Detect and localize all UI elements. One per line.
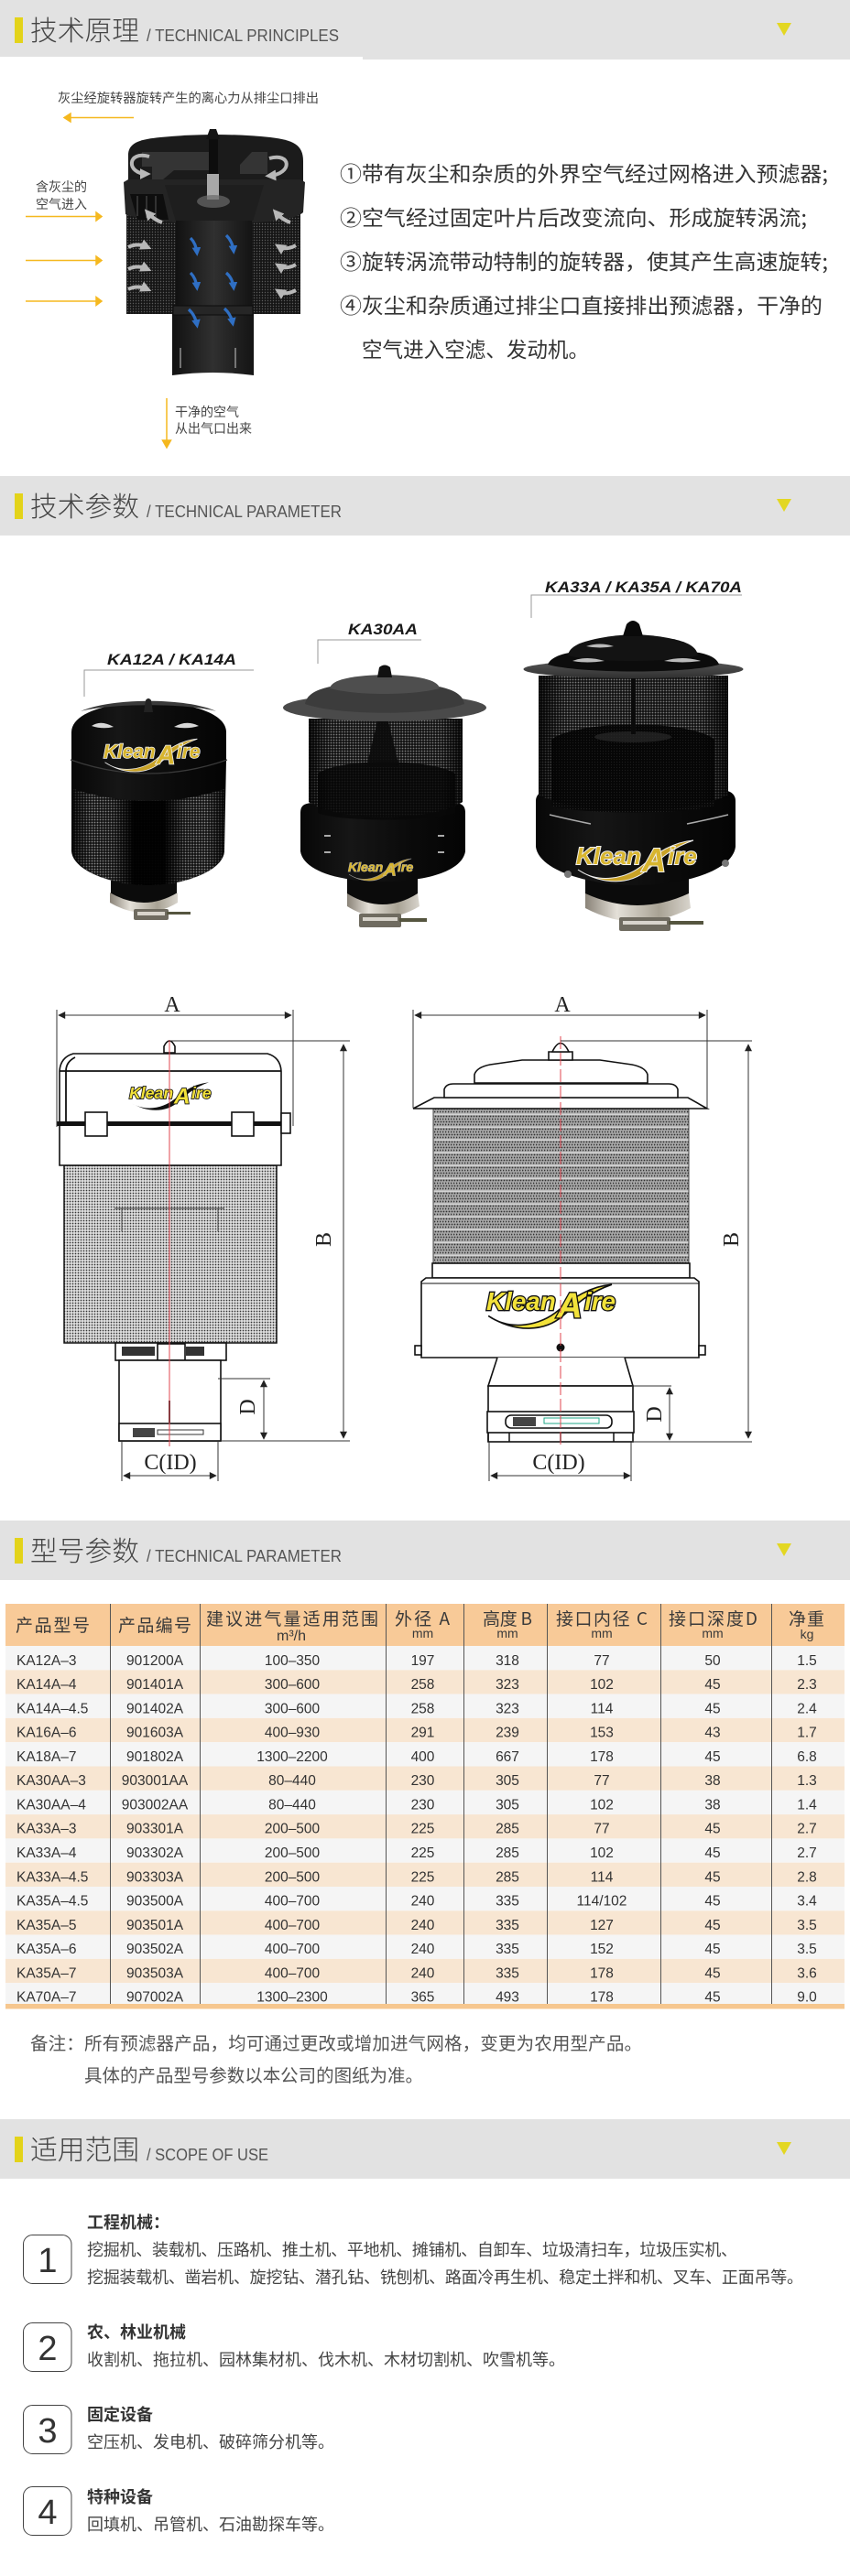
row KA35A-6: 400–700 bbox=[265, 1942, 321, 1957]
row KA33A-4: 225 bbox=[411, 1845, 434, 1861]
row KA70A-7: 9.0 bbox=[797, 1990, 817, 2005]
section header: scope of use bbox=[0, 2119, 850, 2179]
row KA18A-7: 901802A bbox=[126, 1749, 184, 1765]
table header row: 接口深度D bbox=[669, 1606, 757, 1630]
row KA33A-4: 2.7 bbox=[797, 1845, 817, 1861]
row KA14A-4.5: 300–600 bbox=[265, 1701, 321, 1717]
row KA70A-7: KA70A–7 bbox=[16, 1990, 77, 2005]
row KA16A-6: 901603A bbox=[126, 1725, 184, 1741]
row KA30AA-4: 305 bbox=[496, 1798, 519, 1813]
row KA70A-7: 178 bbox=[590, 1990, 614, 2005]
section header: scope of use: / SCOPE OF USE bbox=[147, 2146, 268, 2164]
text block: working principle steps: ③旋转涡流带动特制的旋转器，使其产生高速旋转; bbox=[340, 244, 828, 276]
section header: scope of use: 适用范围 bbox=[30, 2127, 139, 2168]
row KA30AA-4: KA30AA–4 bbox=[16, 1798, 86, 1813]
dimension D: D bbox=[643, 1406, 667, 1423]
section header: technical principles bbox=[0, 0, 850, 60]
scope item 1: construction machinery: 工程机械： bbox=[87, 2210, 169, 2234]
table header row: mm bbox=[412, 1626, 433, 1640]
text block: working principle steps bbox=[340, 157, 828, 363]
row KA12A-3: 100–350 bbox=[265, 1653, 321, 1669]
table header row: 外径 A bbox=[395, 1606, 450, 1630]
row KA14A-4.5: KA14A–4.5 bbox=[16, 1701, 88, 1717]
logo: A bbox=[641, 841, 666, 879]
row KA35A-4.5: 335 bbox=[496, 1893, 519, 1910]
row KA14A-4: 45 bbox=[704, 1677, 721, 1693]
arrow: clean air outlet bbox=[163, 398, 170, 448]
row KA35A-5 bbox=[16, 1918, 817, 1933]
row KA16A-6: 291 bbox=[411, 1725, 434, 1741]
number badge: 4 bbox=[38, 2494, 58, 2532]
row KA16A-6: 43 bbox=[704, 1725, 721, 1741]
logo: ire bbox=[177, 741, 200, 763]
caption: clean air out: 从出气口出来 bbox=[175, 419, 252, 438]
row KA14A-4.5: 45 bbox=[704, 1701, 721, 1717]
row KA35A-6: 240 bbox=[411, 1942, 435, 1957]
scope item 4: special equipment: 特种设备 bbox=[87, 2484, 153, 2508]
section header: technical principles: 技术原理 bbox=[30, 8, 139, 49]
logo: Klean bbox=[576, 842, 641, 870]
row KA35A-6: 45 bbox=[704, 1942, 721, 1957]
row KA16A-6: 400–930 bbox=[265, 1725, 321, 1741]
logo bbox=[486, 1284, 616, 1328]
row KA30AA-3: KA30AA–3 bbox=[16, 1773, 86, 1789]
table header row bbox=[16, 1606, 824, 1644]
row KA14A-4.5: 114 bbox=[591, 1701, 614, 1717]
row KA12A-3: 50 bbox=[704, 1653, 721, 1669]
arrows: inlet air bbox=[26, 212, 102, 306]
row KA70A-7: 907002A bbox=[126, 1990, 184, 2005]
product: KA12A / KA14A bbox=[71, 651, 254, 920]
caption: dusty air in: 含灰尘的 bbox=[36, 178, 87, 196]
row KA14A-4: 102 bbox=[590, 1677, 614, 1693]
row KA12A-3: 197 bbox=[411, 1653, 434, 1669]
section header: model parameters bbox=[0, 1521, 850, 1580]
row KA35A-5: 240 bbox=[411, 1918, 435, 1933]
row KA30AA-3 bbox=[16, 1773, 817, 1789]
row KA30AA-3: 38 bbox=[704, 1773, 721, 1789]
row KA14A-4.5: 2.4 bbox=[797, 1701, 817, 1717]
dimension A bbox=[57, 993, 350, 1441]
row KA30AA-3: 1.3 bbox=[797, 1773, 817, 1789]
row KA35A-7: KA35A–7 bbox=[16, 1966, 77, 1981]
row KA35A-4.5: KA35A–4.5 bbox=[16, 1893, 88, 1910]
row KA33A-3: 225 bbox=[411, 1822, 434, 1836]
dimension D: D bbox=[236, 1399, 260, 1415]
table backgrounds bbox=[5, 1604, 845, 2008]
row KA18A-7: 45 bbox=[704, 1749, 721, 1765]
row KA33A-3: 2.7 bbox=[797, 1822, 817, 1836]
row KA33A-4.5: 903303A bbox=[126, 1869, 184, 1886]
row KA33A-4: 45 bbox=[704, 1845, 721, 1861]
logo: Klean bbox=[129, 1084, 173, 1102]
row KA33A-3 bbox=[16, 1822, 817, 1836]
row KA35A-4.5: 400–700 bbox=[265, 1893, 321, 1910]
scope item 3: stationary equipment bbox=[24, 2402, 334, 2453]
table header row: 产品型号 bbox=[16, 1612, 90, 1637]
dimension drawing: lid-type filter bbox=[57, 993, 350, 1481]
row KA35A-5: KA35A–5 bbox=[16, 1918, 77, 1933]
row KA14A-4: 2.3 bbox=[797, 1677, 817, 1693]
table header row: 高度 B bbox=[483, 1606, 532, 1630]
logo: ire bbox=[398, 860, 413, 874]
number badge bbox=[24, 2235, 71, 2283]
row KA30AA-4: 230 bbox=[411, 1798, 435, 1813]
row KA33A-4: 903302A bbox=[126, 1845, 184, 1861]
number badge: 1 bbox=[38, 2242, 58, 2280]
row KA35A-7: 335 bbox=[496, 1966, 519, 1981]
model label: KA12A / KA14A bbox=[107, 651, 236, 668]
row KA35A-4.5 bbox=[16, 1893, 817, 1910]
product photo bbox=[283, 665, 486, 927]
arrow: dust outlet bbox=[64, 114, 134, 122]
row KA14A-4.5: 901402A bbox=[126, 1701, 184, 1717]
dimension D bbox=[643, 1388, 670, 1440]
text block: working principle steps: ④灰尘和杂质通过排尘口直接排出预滤器，干净的 bbox=[340, 288, 823, 319]
row KA35A-6: 903502A bbox=[126, 1942, 184, 1957]
row KA12A-3: 1.5 bbox=[797, 1653, 817, 1669]
row KA14A-4 bbox=[16, 1677, 817, 1693]
row KA12A-3: 901200A bbox=[126, 1653, 184, 1669]
row KA33A-3: 45 bbox=[704, 1822, 721, 1836]
row KA33A-4.5: 114 bbox=[591, 1869, 614, 1886]
note text bbox=[30, 2029, 642, 2087]
model label: KA30AA bbox=[348, 621, 418, 638]
row KA35A-5: 127 bbox=[590, 1918, 614, 1933]
dimension B: B bbox=[720, 1232, 744, 1247]
text block: working principle steps: ②空气经过固定叶片后改变流向、形成旋转涡流; bbox=[340, 200, 807, 232]
section header: model parameters: 型号参数 bbox=[30, 1529, 139, 1569]
logo bbox=[129, 1082, 212, 1110]
row KA14A-4.5 bbox=[16, 1701, 817, 1717]
table header row: 净重 bbox=[789, 1606, 824, 1630]
row KA35A-7 bbox=[16, 1966, 817, 1981]
row KA33A-4: 285 bbox=[496, 1845, 519, 1861]
row KA35A-6 bbox=[16, 1942, 817, 1957]
scope item 3: stationary equipment: 固定设备 bbox=[87, 2402, 153, 2426]
dimension A: A bbox=[164, 993, 180, 1017]
row KA33A-4: 200–500 bbox=[265, 1845, 321, 1861]
row KA33A-4 bbox=[16, 1845, 817, 1861]
row KA33A-4.5 bbox=[16, 1869, 817, 1886]
row KA70A-7: 45 bbox=[704, 1990, 721, 2005]
row KA14A-4.5: 258 bbox=[411, 1701, 434, 1717]
logo bbox=[104, 739, 200, 772]
row KA14A-4: KA14A–4 bbox=[16, 1677, 77, 1693]
scope item 2: agriculture and forestry bbox=[24, 2320, 565, 2371]
row KA33A-4.5: KA33A–4.5 bbox=[16, 1869, 88, 1886]
dimension C(ID): C(ID) bbox=[144, 1451, 197, 1475]
note text: 具体的产品型号参数以本公司的图纸为准。 bbox=[84, 2061, 423, 2087]
text block: working principle steps: ①带有灰尘和杂质的外界空气经过网格进入预滤器; bbox=[340, 157, 828, 188]
product: KA33A / KA35A / KA70A bbox=[524, 579, 744, 931]
row KA30AA-4: 102 bbox=[590, 1798, 614, 1813]
row KA14A-4: 300–600 bbox=[265, 1677, 321, 1693]
row KA35A-4.5: 903500A bbox=[126, 1893, 184, 1910]
row KA33A-4.5: 225 bbox=[411, 1869, 434, 1886]
section header: technical parameter: 技术参数 bbox=[30, 484, 139, 525]
row KA35A-7: 903503A bbox=[126, 1966, 184, 1981]
product: KA30AA bbox=[283, 621, 486, 927]
row KA16A-6: 1.7 bbox=[797, 1725, 817, 1741]
row KA35A-5: 335 bbox=[496, 1918, 519, 1933]
row KA12A-3: 318 bbox=[496, 1653, 519, 1669]
row KA14A-4.5: 323 bbox=[496, 1701, 519, 1717]
row KA33A-4: 102 bbox=[590, 1845, 614, 1861]
dimension A: A bbox=[554, 993, 571, 1017]
diagram: airflow cross-section bbox=[26, 89, 319, 448]
product photo bbox=[71, 698, 227, 920]
row KA14A-4: 323 bbox=[496, 1677, 519, 1693]
logo bbox=[576, 840, 697, 882]
row KA35A-7: 240 bbox=[411, 1966, 435, 1981]
dimension D bbox=[236, 1380, 264, 1439]
scope item 4: special equipment: 回填机、吊管机、石油勘探车等。 bbox=[87, 2512, 334, 2536]
logo: A bbox=[556, 1287, 583, 1326]
table header row: 产品编号 bbox=[118, 1612, 191, 1637]
row KA35A-7: 45 bbox=[704, 1966, 721, 1981]
logo: ire bbox=[668, 842, 697, 870]
row KA18A-7 bbox=[16, 1749, 817, 1765]
logo: Klean bbox=[104, 741, 156, 763]
row KA30AA-3: 77 bbox=[594, 1773, 610, 1789]
row KA33A-4.5: 200–500 bbox=[265, 1869, 321, 1886]
number badge: 2 bbox=[38, 2330, 58, 2368]
row KA18A-7: 400 bbox=[411, 1749, 435, 1765]
row KA18A-7: KA18A–7 bbox=[16, 1749, 77, 1765]
filter cutaway bbox=[124, 129, 305, 375]
row KA14A-4: 258 bbox=[411, 1677, 434, 1693]
number badge bbox=[24, 2406, 71, 2453]
scope item 1: construction machinery bbox=[24, 2210, 803, 2289]
logo: Klean bbox=[348, 860, 383, 874]
table header row: mm bbox=[591, 1626, 613, 1640]
product photo bbox=[524, 621, 744, 931]
logo bbox=[348, 859, 413, 881]
table header row: m³/h bbox=[277, 1629, 306, 1644]
row KA16A-6 bbox=[16, 1725, 817, 1741]
row KA12A-3: KA12A–3 bbox=[16, 1653, 77, 1669]
row KA33A-3: 77 bbox=[594, 1822, 610, 1836]
logo: A bbox=[173, 1084, 191, 1109]
dimension drawing: hat-type filter bbox=[413, 993, 752, 1481]
row KA70A-7: 365 bbox=[411, 1990, 434, 2005]
row KA33A-4.5: 45 bbox=[704, 1869, 721, 1886]
text block: working principle steps: 空气进入空滤、发动机。 bbox=[362, 332, 589, 363]
row KA33A-3: KA33A–3 bbox=[16, 1822, 77, 1836]
row KA30AA-4: 80–440 bbox=[268, 1798, 316, 1813]
row KA30AA-4: 903002AA bbox=[122, 1798, 189, 1813]
row KA35A-4.5: 114/102 bbox=[577, 1893, 627, 1910]
dimension A bbox=[413, 993, 752, 1442]
row KA35A-6: KA35A–6 bbox=[16, 1942, 77, 1957]
logo: Klean bbox=[486, 1287, 556, 1315]
row KA35A-4.5: 240 bbox=[411, 1893, 435, 1910]
section header: technical principles: / TECHNICAL PRINCIPLES bbox=[147, 27, 339, 45]
caption: clean air out: 干净的空气 bbox=[175, 403, 239, 421]
row KA30AA-4 bbox=[16, 1798, 817, 1813]
row KA33A-4.5: 285 bbox=[496, 1869, 519, 1886]
note text: 备注：所有预滤器产品，均可通过更改或增加进气网格，变更为农用型产品。 bbox=[30, 2029, 642, 2055]
row KA18A-7: 1300–2200 bbox=[256, 1749, 328, 1765]
row KA14A-4: 901401A bbox=[126, 1677, 184, 1693]
row KA35A-7: 400–700 bbox=[265, 1966, 321, 1981]
scope item 1: construction machinery: 挖掘机、装载机、压路机、推土机、平地机、摊铺机、自卸车、垃圾清扫车，垃圾压实机、 bbox=[87, 2237, 737, 2261]
section header: model parameters: / TECHNICAL PARAMETER bbox=[147, 1547, 342, 1565]
table header row: 接口内径 C bbox=[556, 1606, 648, 1630]
row KA70A-7: 493 bbox=[496, 1990, 519, 2005]
scope item 2: agriculture and forestry: 收割机、拖拉机、园林集材机、伐木机、木材切割机、吹雪机等。 bbox=[87, 2347, 565, 2371]
row KA35A-5: 400–700 bbox=[265, 1918, 321, 1933]
row KA35A-7: 3.6 bbox=[797, 1966, 817, 1981]
scope item 3: stationary equipment: 空压机、发电机、破碎筛分机等。 bbox=[87, 2430, 334, 2453]
row KA35A-5: 3.5 bbox=[797, 1918, 817, 1933]
caption: dust discharge: 灰尘经旋转器旋转产生的离心力从排尘口排出 bbox=[58, 89, 319, 107]
row KA70A-7: 1300–2300 bbox=[256, 1990, 328, 2005]
caption: dusty air in: 空气进入 bbox=[36, 195, 87, 213]
row KA16A-6: 239 bbox=[496, 1725, 519, 1741]
row KA35A-5: 903501A bbox=[126, 1918, 184, 1933]
row KA35A-5: 45 bbox=[704, 1918, 721, 1933]
table header row: kg bbox=[801, 1627, 813, 1641]
row KA16A-6: KA16A–6 bbox=[16, 1725, 77, 1741]
row KA33A-3: 200–500 bbox=[265, 1822, 321, 1836]
logo: A bbox=[383, 860, 397, 880]
number badge: 3 bbox=[38, 2412, 58, 2451]
dimension C(ID) bbox=[122, 1441, 218, 1481]
logo: ire bbox=[584, 1287, 616, 1315]
dimension C(ID) bbox=[489, 1442, 631, 1481]
scope item 2: agriculture and forestry: 农、林业机械 bbox=[87, 2320, 186, 2343]
scope item 1: construction machinery: 挖掘装载机、凿岩机、旋挖钻、潜孔钻、铣刨机、路面冷再生机、稳定土拌和机、叉车、正面吊等。 bbox=[87, 2265, 803, 2289]
row KA33A-4: KA33A–4 bbox=[16, 1845, 77, 1861]
row KA33A-4.5: 2.8 bbox=[797, 1869, 817, 1886]
row KA35A-4.5: 45 bbox=[704, 1893, 721, 1910]
dimension B: B bbox=[312, 1232, 336, 1247]
row KA30AA-4: 1.4 bbox=[797, 1798, 817, 1813]
row KA30AA-3: 230 bbox=[411, 1773, 435, 1789]
row KA35A-6: 335 bbox=[496, 1942, 519, 1957]
row KA12A-3 bbox=[16, 1653, 817, 1669]
row KA18A-7: 6.8 bbox=[797, 1749, 817, 1765]
row KA30AA-3: 903001AA bbox=[122, 1773, 189, 1789]
row KA35A-4.5: 3.4 bbox=[797, 1893, 817, 1910]
row KA12A-3: 77 bbox=[594, 1653, 610, 1669]
row KA70A-7 bbox=[16, 1990, 817, 2005]
table: model parameters bbox=[5, 1604, 845, 2008]
row KA35A-6: 152 bbox=[590, 1942, 614, 1957]
row KA30AA-3: 80–440 bbox=[268, 1773, 316, 1789]
row KA33A-3: 903301A bbox=[126, 1822, 184, 1836]
row KA16A-6: 153 bbox=[590, 1725, 614, 1741]
table header row: 建议进气量适用范围 bbox=[206, 1606, 378, 1630]
section header: technical parameter: / TECHNICAL PARAMETER bbox=[147, 503, 342, 521]
row KA18A-7: 667 bbox=[496, 1749, 519, 1765]
number badge bbox=[24, 2486, 71, 2536]
section header: technical parameter bbox=[0, 476, 850, 536]
row KA18A-7: 178 bbox=[590, 1749, 614, 1765]
row KA30AA-3: 305 bbox=[496, 1773, 519, 1789]
number badge bbox=[24, 2323, 71, 2371]
logo: A bbox=[156, 741, 175, 770]
table header row: mm bbox=[496, 1626, 518, 1640]
row KA35A-6: 3.5 bbox=[797, 1942, 817, 1957]
row KA33A-3: 285 bbox=[496, 1822, 519, 1836]
row KA35A-7: 178 bbox=[590, 1966, 614, 1981]
scope item 4: special equipment bbox=[24, 2484, 334, 2536]
dimension C(ID): C(ID) bbox=[532, 1451, 585, 1475]
model label: KA33A / KA35A / KA70A bbox=[545, 579, 742, 596]
logo: ire bbox=[191, 1084, 212, 1102]
row KA30AA-4: 38 bbox=[704, 1798, 721, 1813]
table header row: mm bbox=[702, 1626, 724, 1640]
